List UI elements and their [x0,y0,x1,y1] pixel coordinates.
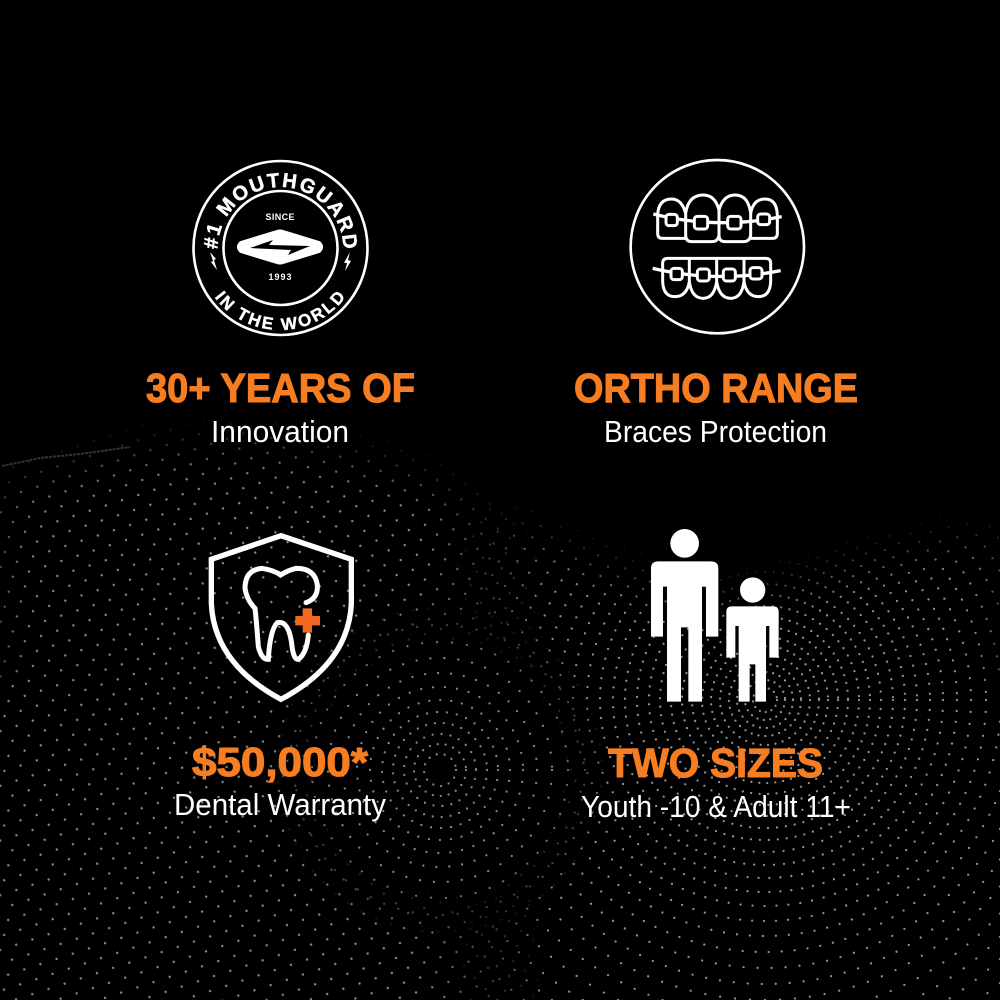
panel: 30+ years of innovation [146,160,415,449]
icon: mouthguard badge: 1993 [268,272,292,282]
icon: mouthguard badge: IN THE WORLD [214,290,344,330]
panel: two sizes [581,529,851,824]
icon: braces [631,160,804,333]
text: innovation: Innovation [211,414,349,449]
panel: dental warranty [174,536,386,822]
heading: two sizes: TWO SIZES [608,740,823,786]
text: dental warranty: Dental Warranty [174,787,386,822]
heading: 30+ years of: 30+ YEARS OF [146,365,415,411]
heading: ortho range: ORTHO RANGE [574,365,858,411]
icon: mouthguard badge: SINCE [266,212,294,222]
icon: adult and child figures [651,529,779,702]
heading: $50,000*: $50,000* [192,739,368,785]
icon: mouthguard badge [192,160,369,336]
background dot wave [0,418,1000,1000]
text: youth and adult sizes: Youth -10 & Adult 11+ [581,789,851,824]
text: braces protection: Braces Protection [604,414,827,449]
panel: ortho range [574,160,858,449]
icon: tooth shield [211,536,351,699]
icon: mouthguard badge: #1 MOUTHGUARD [204,172,357,249]
